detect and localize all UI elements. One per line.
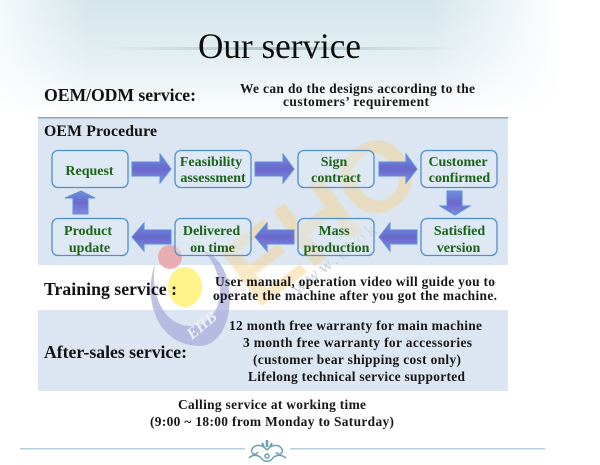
- page background wash: [0, 0, 562, 118]
- flow chart: [52, 150, 497, 256]
- footer rule left: [20, 448, 245, 450]
- step: Request: Request: [65, 164, 114, 179]
- arrow: sign to customer: [379, 154, 417, 183]
- step: Delivered on time: on time: [190, 241, 235, 256]
- after-sales description: Lifelong technical service supported: [248, 369, 466, 384]
- calling service note: (9:00 ~ 18:00 from Monday to Saturday): [150, 414, 394, 429]
- arrow: feasibility to sign: [255, 154, 294, 183]
- watermark crescent: [151, 250, 230, 346]
- step: Feasibility assessment: Feasibility: [180, 155, 242, 170]
- step: Satisfied version: version: [437, 241, 480, 256]
- training description: User manual, operation video will guide you to: [215, 274, 495, 289]
- step: Mass production: Mass: [318, 224, 350, 239]
- arrow: satisfied to mass: [379, 223, 417, 251]
- step: Request: [52, 150, 128, 188]
- after-sales description: 3 month free warranty for accessories: [243, 335, 472, 350]
- watermark: EHO logo: [151, 110, 441, 346]
- title rule: [100, 47, 460, 50]
- step: Customer confirmed: [421, 150, 497, 188]
- step: Feasibility assessment: [175, 150, 251, 188]
- calling service note: [150, 397, 394, 429]
- watermark yellow circle: [168, 267, 202, 307]
- training description: operate the machine after you got the machine.: [213, 288, 497, 303]
- title: Our service: [198, 26, 361, 66]
- training description: [213, 274, 497, 303]
- step: Sign contract: [298, 150, 374, 188]
- arrow: request to feasibility: [132, 154, 171, 183]
- OEM procedure heading: OEM Procedure: [44, 123, 157, 140]
- arrow: delivered to product: [132, 223, 171, 251]
- watermark letters: EHO: [203, 110, 441, 328]
- calling service note: Calling service at working time: [178, 397, 366, 412]
- watermark red circle: [158, 245, 182, 269]
- step: Product update: update: [69, 241, 110, 256]
- step: Feasibility assessment: assessment: [180, 171, 246, 186]
- OEM/ODM description: [240, 81, 475, 109]
- OEM/ODM description: We can do the designs according to the: [240, 81, 475, 96]
- icon: footer ornament: [249, 440, 286, 461]
- footer rule right: [290, 448, 545, 450]
- step: Satisfied version: Satisfied: [434, 224, 485, 239]
- step: Mass production: production: [304, 241, 370, 256]
- step: Sign contract: contract: [311, 171, 361, 186]
- step: Delivered on time: Delivered: [183, 224, 240, 239]
- step: Satisfied version: [421, 218, 497, 256]
- panel: OEM procedure: [38, 117, 508, 265]
- step: Product update: [52, 218, 128, 256]
- watermark url: www.ehok: [287, 218, 383, 299]
- heading: OEM/ODM service: OEM/ODM service:: [44, 85, 196, 105]
- step: Sign contract: Sign: [321, 155, 347, 170]
- step: Customer confirmed: Customer: [428, 155, 488, 170]
- after-sales description: 12 month free warranty for main machine: [229, 318, 482, 333]
- after-sales description: [229, 318, 482, 384]
- arrow: mass to delivered: [255, 223, 294, 251]
- watermark EHB initials: EHB: [183, 308, 221, 344]
- heading: After-sales service: After-sales service:: [44, 342, 187, 362]
- step: Delivered on time: [175, 218, 251, 256]
- panel: after-sales background: [38, 310, 508, 391]
- OEM/ODM description: customers’ requirement: [283, 94, 430, 109]
- arrow: customer to satisfied: [440, 191, 470, 215]
- heading: Training service: Training service :: [44, 279, 177, 299]
- step: Customer confirmed: confirmed: [429, 171, 490, 186]
- arrow: product to request: [65, 191, 95, 214]
- after-sales description: (customer bear shipping cost only): [253, 352, 461, 367]
- step: Product update: Product: [64, 224, 112, 239]
- step: Mass production: [298, 218, 374, 256]
